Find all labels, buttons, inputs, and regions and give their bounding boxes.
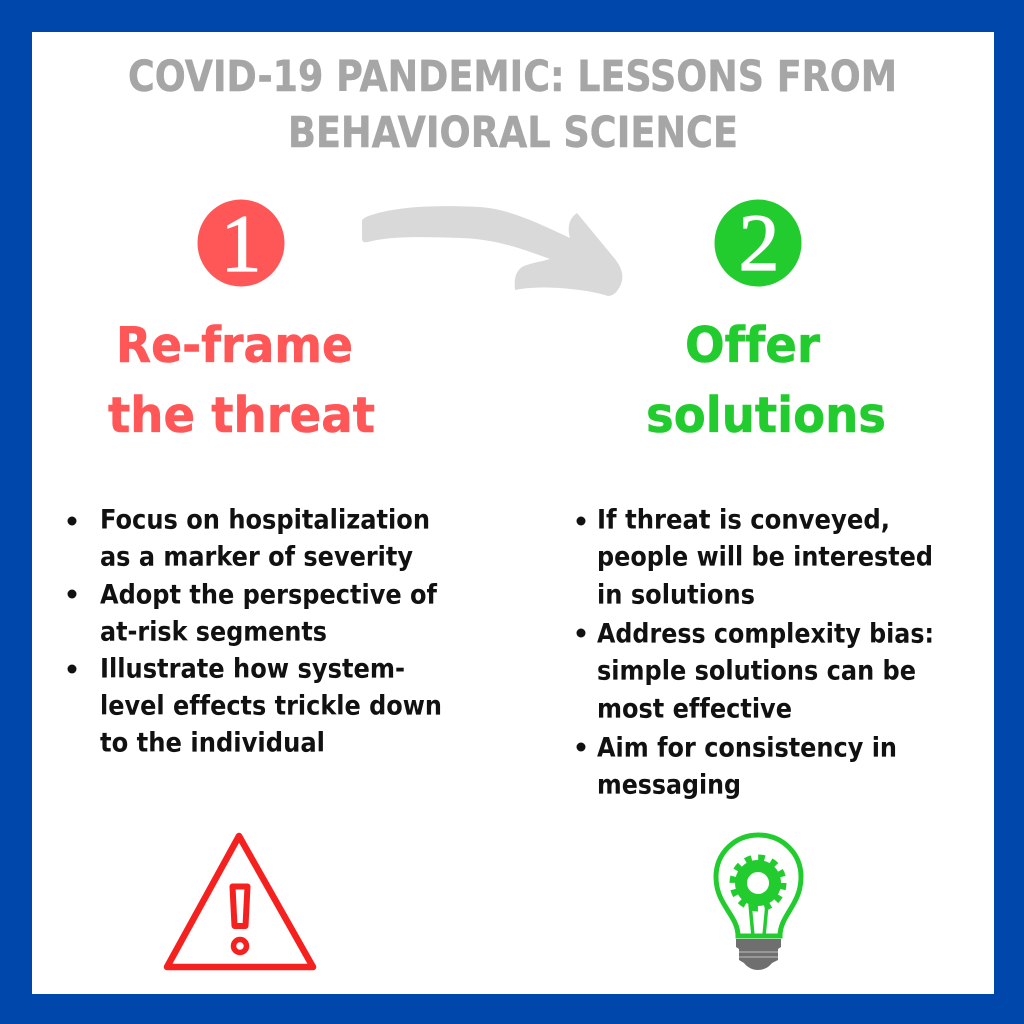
bullet list: offer solutions: people will be interested: [597, 542, 933, 572]
title: BEHAVIORAL SCIENCE: [288, 108, 738, 158]
bullet list: offer solutions: Aim for consistency in: [597, 732, 897, 764]
heading: offer solutions: Offer: [685, 317, 821, 374]
bullet list: re-frame the threat: level effects trickle down: [100, 690, 442, 722]
bullet list: offer solutions: messaging: [597, 770, 741, 800]
number badge 1: [198, 198, 284, 289]
bullet list: re-frame the threat: to the individual: [100, 728, 325, 758]
bullet list: offer solutions: Address complexity bias:: [597, 618, 934, 650]
icon: warning triangle: [167, 836, 313, 967]
heading: re-frame the threat: the threat: [108, 387, 375, 444]
arrow from step 1 to step 2: [362, 206, 622, 296]
title: [128, 52, 897, 158]
heading: re-frame the threat: Re-frame: [116, 317, 353, 374]
number badge 2: 2: [738, 197, 780, 288]
bullet list: offer solutions: most effective: [597, 694, 792, 724]
heading: offer solutions: solutions: [646, 387, 886, 444]
number badge 2: [714, 197, 802, 288]
bullet list: offer solutions: If threat is conveyed,: [597, 504, 890, 536]
bullet list: offer solutions: simple solutions can be: [597, 656, 916, 686]
icon: light bulb with gear: [716, 835, 801, 970]
number badge 1: 1: [220, 198, 262, 289]
title: COVID-19 PANDEMIC: LESSONS FROM: [128, 52, 897, 102]
bullet list: offer solutions: in solutions: [597, 580, 755, 610]
bullet list: offer solutions: [576, 504, 934, 800]
bullet list: re-frame the threat: Focus on hospitalization: [100, 504, 430, 536]
bullet list: re-frame the threat: [68, 504, 442, 758]
bullet list: re-frame the threat: as a marker of severity: [100, 542, 413, 572]
heading: re-frame the threat: [108, 317, 375, 444]
bullet list: re-frame the threat: at-risk segments: [100, 616, 327, 648]
bullet list: re-frame the threat: Adopt the perspective of: [100, 580, 437, 610]
bullet list: re-frame the threat: Illustrate how system-: [100, 654, 405, 684]
heading: offer solutions: [646, 317, 886, 444]
